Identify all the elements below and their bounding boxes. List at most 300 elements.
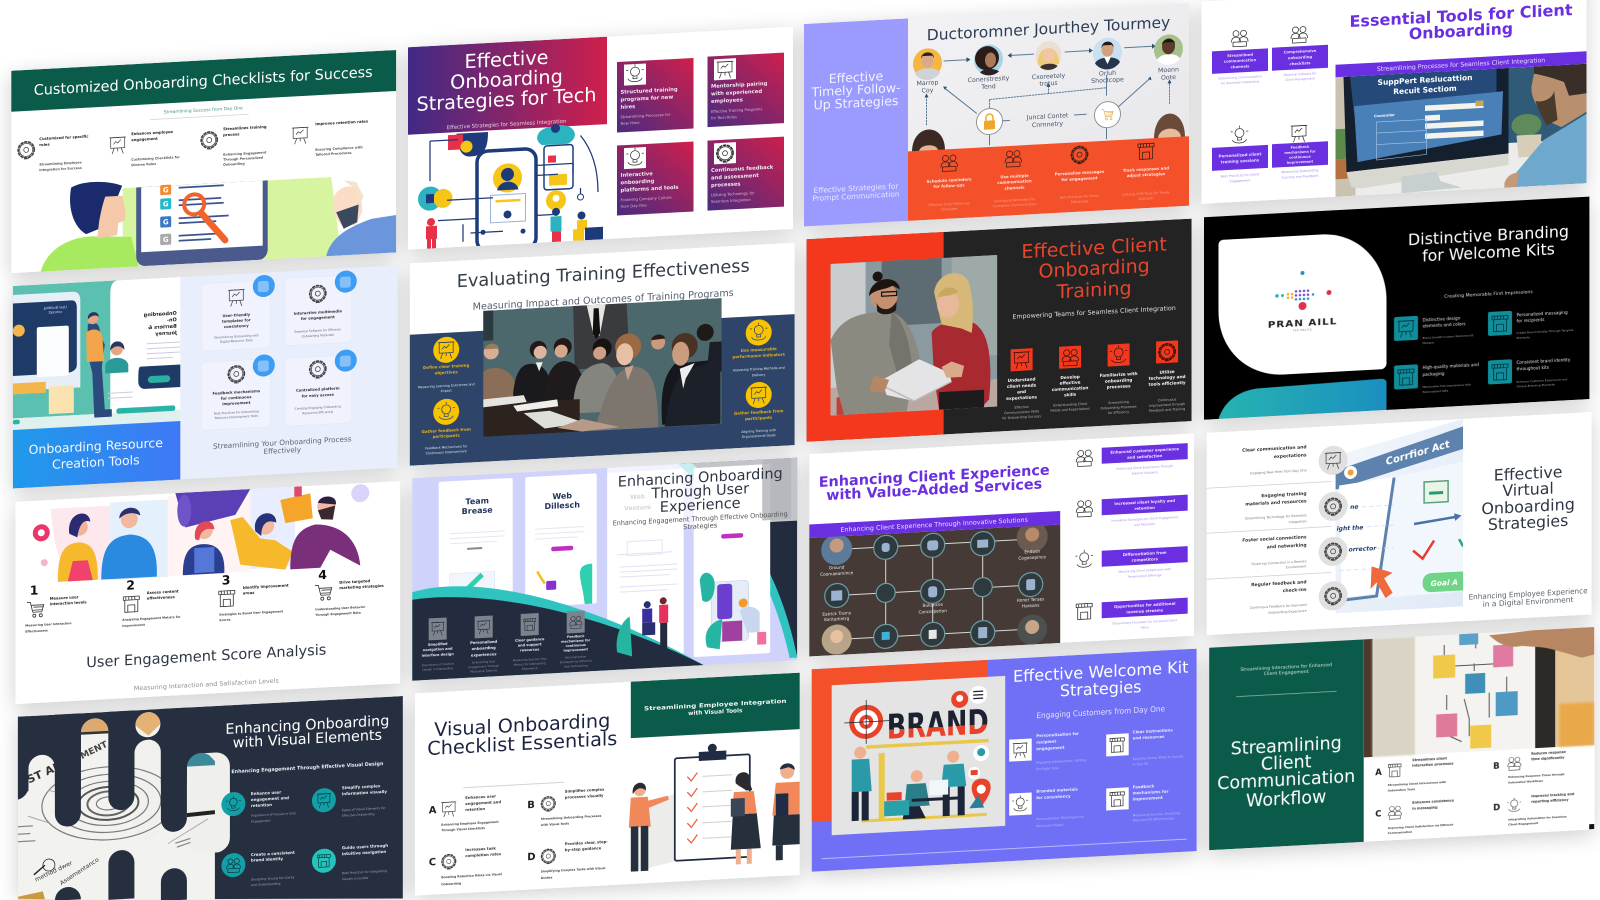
item: streamlines training [201,125,267,168]
item: familiarize: Familiarize with [1100,371,1138,379]
item: measurable indicators [732,318,786,378]
title: Effective Welcome Kit [1013,658,1188,686]
item: personalized experiences [469,615,499,674]
card: mentorship: employees [711,97,743,105]
item D: Provides clear, step- [565,840,608,846]
item D: Simplifying Complex Tasks with Visual [541,866,605,874]
photo: people network: Coomaeamince [820,570,854,578]
item: personalize: for engagement [1061,175,1098,182]
item: customized [18,135,88,173]
item: branded materials: Maximum Impact [1036,823,1064,828]
item: loyalty: retention [1134,505,1155,511]
item: enhances engagement: Customizing Checklists for [131,155,180,162]
item D: D [527,852,536,863]
item C: Enhances consistency [1412,798,1455,805]
item: personalization: engagement [1036,745,1065,751]
item B [527,788,605,828]
dark right corner [678,458,797,663]
card: continuous feedback: and assessment [711,173,759,181]
card: multimedia: Interactive multimedia [294,309,342,316]
card: mentorship: Effective Training Programs [711,107,762,114]
image: sketch in rounded mask: method dwer [34,859,74,884]
illustration: onboarding screens: User Building [44,305,67,310]
item: feedback mechanisms: mechanisms for [1284,149,1316,155]
item: gather feedback left: Continuous Improvement [426,449,468,455]
item: familiarize: Onboarding Processes [1101,405,1137,410]
photo: people network: Cogooepince [1018,554,1046,562]
item C [1375,798,1455,836]
item: instructions: in Your Kit [1133,762,1149,767]
item: gather feedback right: participants [745,415,773,421]
step 4: Through Engagement Data [315,611,361,617]
card: continuous feedback [708,137,784,211]
journey diagram: Orluh [1099,70,1116,78]
band [809,511,1060,538]
item: instructions: and resources [1133,734,1165,741]
subtitle: Creating Memorable First Impressions [1444,289,1533,300]
card: mentorship: for Tech Roles [711,115,737,120]
card: templates: templates for [222,318,251,324]
item: materials [1394,361,1479,396]
logo card: TEE PRAITE [1293,327,1312,333]
subtitle: in a Digital Environment [1483,595,1574,609]
step 1 [25,580,87,634]
card: feedback: Resource Development Tools [215,414,258,420]
item: feedback: Feedback [567,634,585,639]
item: onboarding checklists: Essential Software for [1284,71,1317,77]
item: simplified navigation: Design in Onboarding [423,666,453,672]
item: loyalty [1076,495,1188,530]
item: gather feedback right: Organizational Goals [742,433,776,439]
title block: Creation Tools [52,452,140,472]
item A: Streamlines client [1412,756,1447,762]
item: training sessions: Best Practices for Client [1221,172,1260,178]
title block: Venture [624,504,651,512]
item: training sessions: Engagement [1230,178,1251,183]
item: define objectives: Measuring Learning Outcomes and [418,382,475,389]
photo: people network: Bukances [922,602,943,609]
item: gather feedback right: Gather feedback from [734,408,783,416]
item: communication skills: communication [1052,385,1088,393]
item: loyalty: and Retention [1134,522,1155,527]
title block [408,37,607,135]
item: simplified navigation: navigation and [423,647,453,652]
item B: Reduces response [1531,750,1567,756]
journey diagram: Marrop [917,79,938,87]
card: interactive platforms [617,141,694,216]
card: structured training: Streamlining Processes for [620,113,671,119]
item: simplified navigation [422,617,454,672]
card: continuous feedback: processes [711,181,741,189]
panel: Effective Welcome Kit Strategies [812,649,1197,872]
title: Timely Follow- [810,80,901,100]
step 1: Effectiveness [25,628,48,634]
item B: B [1493,762,1500,772]
item: familiarize: for Efficiency [1108,410,1129,415]
item: personalization: Personalization for [1036,731,1079,738]
item: clear guidance: Measuring Success: Key [513,657,547,662]
item: retention [292,119,369,158]
title block: Enhancing Engagement Through Effective Onboarding [613,510,788,528]
item: technology: Utilize [1159,369,1175,376]
item: clear communication: Clear communication and [1242,444,1307,454]
subtitle: Enhancing Engagement Through Effective Visual Design [231,761,384,775]
item: simplify: information visually [342,789,387,796]
item: consistent identity: Unique Branding Elements [1516,382,1556,388]
item: branded materials [1009,786,1084,830]
card: templates: Streamlining Onboarding with [214,333,259,340]
title: Evaluating Training Effectiveness [457,257,750,292]
item: simplify: Effective Onboarding [342,812,375,818]
photo: people network: Haroans [1022,603,1039,610]
item: differentiation: Differentiation from [1123,550,1167,557]
title block: Strategies [683,521,718,531]
panel: Enhancing Onboarding Through User Experience [412,458,797,681]
card: templates: consistency [224,324,249,329]
item: design elements: Brand Growth:Custom Welcome Kit [1422,333,1474,340]
step 3 [219,569,289,622]
item: materials: Personalized Gifts [1422,389,1449,394]
title: Training [1056,277,1132,303]
illustration: reviewing checklist: G [163,218,169,227]
callout: green header: Streamlining Employee Integration [644,699,787,712]
item C: C [1375,809,1381,820]
item: technology: technology and [1149,374,1186,382]
title: Client [1261,752,1312,775]
item B [1493,750,1567,785]
panel: Customized Onboarding Checklists [11,50,396,273]
logo card [1218,231,1386,378]
item: gather feedback left: Gather feedback from [421,427,471,434]
panel: Evaluating Training Effectiveness [410,243,795,466]
screen: Team Brease [439,478,513,607]
item: differentiation [1076,545,1188,582]
step 3: Strategies to Boost User Engagement [219,609,284,617]
card: central platform [284,349,357,426]
item: loyalty: Innovative Strategies for Client Engagement [1111,515,1179,523]
screen: Team Brease: Team [465,496,489,506]
item: navigation: intuitive navigation [342,849,386,856]
title: Virtual [1502,479,1554,500]
title block: Through User [650,481,749,502]
title: Visual Onboarding [434,710,610,741]
journey diagram: Tend [980,83,996,91]
photo: people network: Ground [829,565,845,571]
card: central platform: Centralized platform [296,386,340,393]
item A [1375,756,1453,793]
step 4: marketing strategies [339,584,384,590]
item: engagement: Engagement [251,819,271,824]
item: simplify: Simplify complex [342,783,381,790]
item D: reporting efficiency [1531,798,1569,804]
item: gather feedback right [734,381,783,439]
item C: Onboarding [441,881,461,886]
item: instructions [1106,727,1183,768]
subtitle: Measuring Impact and Outcomes of Training Programs [473,288,734,313]
item: gather feedback left: participants [433,433,460,439]
item: familiarize [1100,343,1138,416]
item: onboarding checklists: Client Management [1285,76,1316,82]
item: understand needs [1002,348,1041,420]
item: communication skills: Develop [1060,374,1080,381]
item D: Improves tracking and [1531,792,1575,798]
item: technology: tools efficiently [1149,380,1186,388]
panel: Visual Onboarding Checklist Essentials [415,673,800,896]
item: feedback mechanisms: Success and Feedback [1282,174,1318,180]
item: satisfaction: and satisfaction [1127,453,1163,460]
step 2: effectiveness [147,595,176,601]
item D [1493,792,1575,827]
illustration: tech network [418,121,603,255]
title block: Web [630,493,646,501]
item: track responses [1122,142,1170,202]
item: schedule reminders: Strategies [941,207,958,212]
item: engagement: retention [251,802,272,808]
item: technology: Feedback and Training [1149,407,1185,413]
item: revenue: Streamlining Processes for Increased Client [1112,618,1178,626]
item D [527,840,608,881]
band: Enhancing Client Experience Through Innovative Solutions [840,517,1028,534]
item: communication channels: Streamlining Communication [1218,74,1262,81]
item: onboarding checklists [1272,25,1328,83]
item: feedback mechanisms: continuous [1289,155,1311,160]
illustration: onboarding screens: Journey [155,330,178,337]
item: track responses: Track responses and [1123,165,1169,173]
item: engagement: Enhance user [251,790,281,796]
item: satisfaction: Enhanced customer experience [1110,446,1179,455]
item: engagement: engagement and [251,795,289,802]
item: familiarize: onboarding [1105,377,1132,385]
item: clear guidance: Clear guidance [515,637,545,643]
screen: Web Dillesch [525,473,597,607]
item: communication skills: Needs and Expectations [1050,407,1090,413]
item: track responses: Utilizing CRM Tools for Timely [1122,190,1170,197]
title: for Welcome Kits [1422,239,1555,266]
illustration: reviewing checklist: G [163,186,169,195]
item B: processes visually [565,794,604,800]
item: personalization: recipient [1036,739,1056,745]
title: Essential Tools for Client [1350,0,1573,31]
item C: Increases task [465,846,496,852]
screen: mobile app [694,464,770,657]
journey diagram: Coy [922,87,934,95]
step 2: Improvement [122,623,146,628]
item: understand needs: Understand [1008,376,1036,384]
item: design elements [1394,313,1474,347]
item: design elements: Distinctive design [1422,315,1461,324]
step 1: 1 [30,582,38,598]
illustration: onboarding screens: Onboarding [143,311,177,318]
step 2: Analyzing Engagement Metrics for [122,615,181,622]
item: customized: roles [39,143,50,147]
item: gather feedback left: Feedback Mechanisms for [425,444,468,450]
card: structured training: Structured training [620,87,678,96]
item: clear guidance: Metrics for Onboarding [514,661,546,667]
item B: Simplifies complex [565,788,605,794]
item: onboarding checklists: checklists [1290,61,1311,66]
item: communication channels: communication [1224,58,1256,64]
title: Onboarding [1481,494,1575,518]
item: personalized experiences: Onboarding User [472,659,496,665]
item: simplified navigation: Importance of Intuitive [422,662,454,667]
item D: Client Engagement [1508,821,1539,827]
callout: green header [631,673,800,738]
item: feedback [1106,782,1180,824]
panel: Effective Client Onboarding Training [807,219,1192,442]
title: Effective [829,68,884,86]
step 2: 2 [126,577,135,593]
title: Streamlining [1231,734,1342,760]
card: structured training [617,58,694,133]
item: personalized experiences: onboarding [472,646,496,651]
card: central platform: Creating Engaging Onboarding [295,404,341,411]
item: retention: Tailored Procedures [315,151,352,157]
item: understand needs: and [1017,389,1026,395]
item: define objectives [418,335,475,394]
item: gather feedback right: Aligning Training with [741,428,776,434]
illustration: onboarding screens: Barriers & [147,324,177,331]
title block: Enhancing Onboarding [618,466,783,491]
image: sketch in rounded mask: Assementanco [59,856,101,887]
item: communication skills: effective [1060,380,1081,387]
teal shape [1218,378,1386,419]
item: materials: High-quality materials and [1422,362,1479,371]
item: materials: Memorable First Impressions with [1422,382,1471,389]
item: retention: Improves retention rates [315,119,369,126]
title: Enhancing Onboarding [225,713,389,738]
item: personalized experiences: Personalized [470,640,498,645]
band: Streamlining Processes for Seamless Client Integration [1377,57,1545,73]
card: templates: User-friendly [222,313,251,318]
step 1: Measuring User Interaction [25,621,72,628]
item A: A [1375,768,1382,778]
item C [429,846,502,887]
step 3: 3 [222,572,230,588]
panel: Effective Virtual Onboarding Strategies [1207,412,1592,635]
item: feedback mechanisms: improvement [1287,159,1313,165]
item: feedback: mechanisms for [1133,789,1169,796]
item: personalization: the Right Tone [1036,766,1059,771]
step 3: Scores [219,618,231,622]
item: clear guidance: and support [518,642,542,648]
item: define objectives: objectives [435,369,458,375]
item: feedback: User Onboarding [564,663,588,669]
card: structured training: programs for new [620,95,673,103]
item: feedback mechanisms: Measuring Onboarding [1282,168,1318,174]
item: communication skills [1050,345,1090,413]
item: communication skills: Understanding Client [1053,402,1088,408]
item: schedule reminders: Effective Email Follow-Up [928,201,970,207]
card: continuous feedback: Continuous feedback [711,165,774,174]
item: revenue: revenue streams [1126,607,1164,614]
step 4 [315,564,384,617]
title: Effective Client [1021,233,1167,263]
footer text: Streamlining Your Onboarding Process [213,434,352,451]
item A: Automation Tools [1388,787,1415,793]
item: enhances engagement: Enhances employee [131,130,174,136]
item: personalization: Engaging Introductions: Setting [1036,758,1086,765]
item: define objectives: Impact [441,388,453,393]
title: Onboarding [1409,19,1513,43]
illustration: virtual dashboard: Corrfior Act [1385,439,1452,468]
image: sketch in rounded mask [3,690,230,900]
item: personalize: Follow-Ups [1071,199,1089,204]
card: mentorship: with experienced [711,89,762,97]
item: social connections: Environment [1286,564,1307,569]
item: instructions: Essential Items: What to Include [1133,754,1183,761]
item A: interaction processes [1412,762,1453,768]
item: streamlines training: Streamlines training [223,125,267,131]
item: engagement [221,789,297,825]
item C: C [429,857,436,869]
illustration: brand team [832,676,1005,835]
photo: monitor and man: Councellor [1374,113,1395,118]
photo: people network: Roner Teraes [1017,596,1044,604]
journey diagram: Cxoreetely [1032,72,1066,81]
item: onboarding checklists: Comprehensive [1284,49,1317,55]
title block: Onboarding Resource [29,435,163,457]
item B: Streamlining Onboarding Processes [541,814,602,821]
item: understand needs: Communication Skills [1004,409,1039,415]
item: branded materials: for consistency [1036,793,1071,800]
item: feedback: Feedback [1133,783,1154,790]
item: social connections [1242,532,1348,572]
card: structured training: New Hires [620,121,639,126]
card: feedback: for continuous [221,395,252,401]
card: mentorship [708,53,784,127]
item: consistent identity: Consistent brand identity [1516,357,1571,366]
item: feedback: improvement [563,647,588,653]
item B: with Visual Tools [541,821,569,827]
subtitle: Engaging Customers from Day One [1036,704,1165,720]
title: Distinctive Branding [1408,222,1569,249]
item: brand identity: Designing Visuals for Clarity [251,875,295,882]
item A: Enhances user [465,794,496,800]
item: regular feedback: check-ins [1283,587,1307,594]
image: sketch in rounded mask: ST AL [25,760,62,786]
item: regular feedback: Onboarding Experience [1268,609,1307,615]
panel: Enhancing Onboarding with Visual Elements [3,681,403,900]
title: Workflow [1246,787,1326,812]
illustration: team at clipboard [629,739,800,872]
item: engagement: Importance of Visuals in User [251,811,297,818]
item: measurable indicators: Use measurable [741,346,777,353]
item: measurable indicators: Assessing Training Methods and [733,366,785,372]
journey diagram: Moenn [1158,66,1179,74]
screen: Web Dillesch: Web [552,491,572,501]
title: Enhancing Client Experience [819,463,1050,491]
item C: completion rates [465,852,502,858]
journey diagram: Shoctcope [1091,76,1124,85]
panel: Distinctive Branding for Welcome Kits [1204,197,1589,420]
item: brand identity: and Understanding [251,882,281,887]
item: materials: packaging [1422,371,1445,378]
item: familiarize: Streamlining [1108,400,1129,405]
step 4: Understanding User Behavior [315,605,366,612]
subtitle: Streamlining Success from Day One [164,105,243,115]
item D: Integrating Automation for Seamless [1508,814,1567,822]
item: communication skills: skills [1064,392,1077,398]
item A: Streamlining Client Interactions with [1388,780,1446,787]
journey diagram: trotus [1039,80,1058,88]
item: loyalty: Increased client loyalty and [1114,498,1175,506]
title: Up Strategies [814,93,898,112]
item: retention: Ensuring Compliance with [315,145,363,152]
item: consistent identity: throughout kits [1516,365,1549,372]
subtitle: Client Engagement [1264,669,1309,677]
item: satisfaction [1076,443,1188,479]
item: multiple channels: channels [1004,185,1025,191]
